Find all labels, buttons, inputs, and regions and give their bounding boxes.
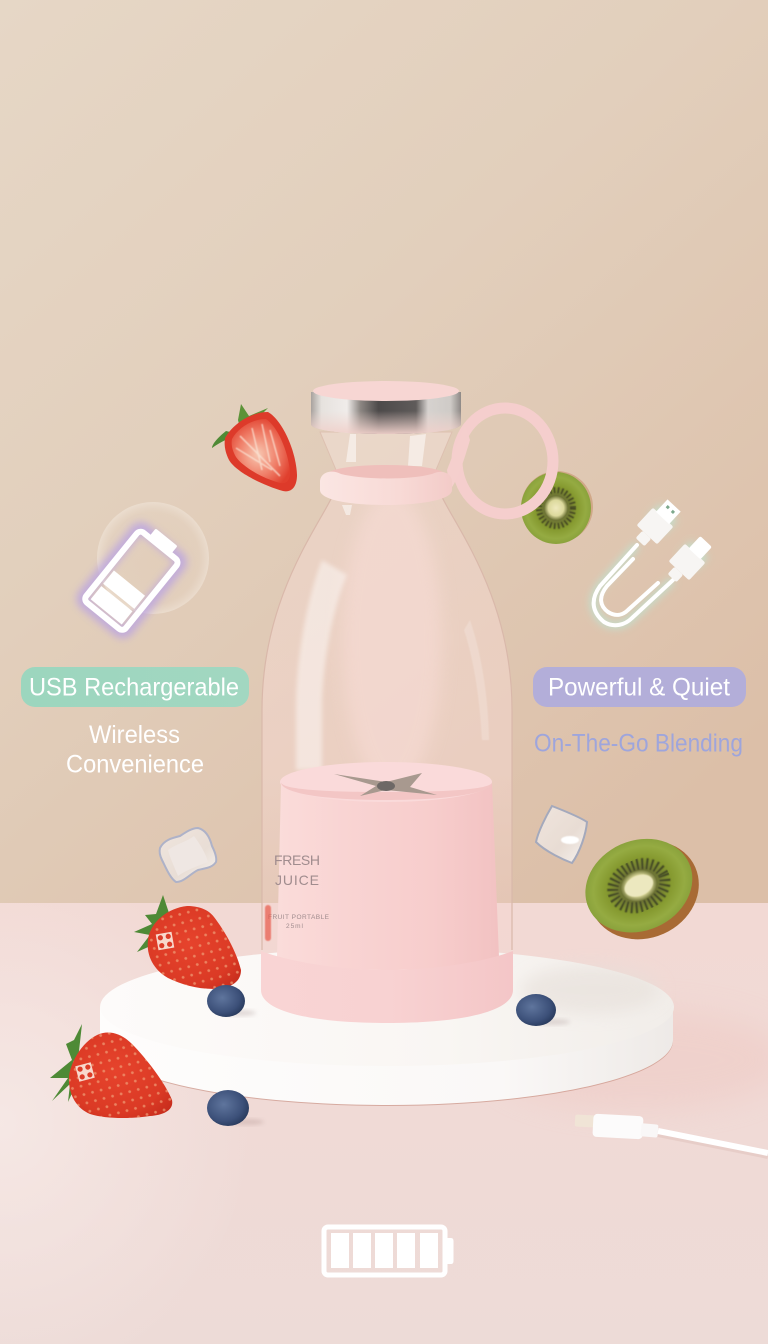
left feature pill: USB Rechargerable <box>29 674 239 702</box>
neck highlights <box>346 434 426 466</box>
left feature pill <box>21 667 249 707</box>
right feature caption: On-The-Go Blending <box>534 730 743 758</box>
right feature pill: Powerful & Quiet <box>548 674 730 702</box>
metal lid band <box>311 392 461 434</box>
table surface <box>0 903 768 1344</box>
FRESH JUICE label <box>268 852 330 930</box>
USB cable icon <box>594 496 716 625</box>
glass body <box>262 497 512 950</box>
juice reflection <box>265 905 271 941</box>
wall background <box>0 0 768 904</box>
glass highlights <box>296 505 489 770</box>
battery icon with halo <box>80 502 209 635</box>
blender cup <box>268 762 499 970</box>
strawberry on table <box>50 1024 172 1118</box>
ice cube left <box>160 828 216 882</box>
blueberry on table <box>207 1090 264 1126</box>
handle ring <box>447 408 553 514</box>
blender bottle <box>261 381 553 1023</box>
FRESH JUICE label: FRESH <box>274 852 320 868</box>
kiwi slice behind handle <box>521 471 593 544</box>
FRESH JUICE label: 25ml <box>286 923 304 930</box>
blender base <box>261 951 513 1023</box>
left feature caption: Convenience <box>66 750 204 778</box>
blueberry on platform right <box>516 994 570 1026</box>
FRESH JUICE label: FRUIT PORTABLE <box>268 914 330 921</box>
white round platform <box>100 948 674 1106</box>
halved strawberry <box>212 404 297 491</box>
left feature caption <box>66 721 204 778</box>
full battery icon <box>324 1227 454 1275</box>
right feature pill <box>533 667 746 707</box>
left feature caption: Wireless <box>89 721 180 749</box>
ice cube right <box>536 806 587 863</box>
kiwi half right <box>570 821 715 957</box>
collar ring <box>320 465 452 505</box>
strawberry on platform <box>134 895 241 989</box>
blueberry on platform left <box>207 985 256 1017</box>
glass neck <box>320 432 452 470</box>
pink lid top <box>313 381 459 401</box>
blade <box>334 773 437 796</box>
USB-C cable on table <box>575 1114 768 1156</box>
inner glass tint <box>342 490 442 790</box>
FRESH JUICE label: JUICE <box>275 872 319 888</box>
